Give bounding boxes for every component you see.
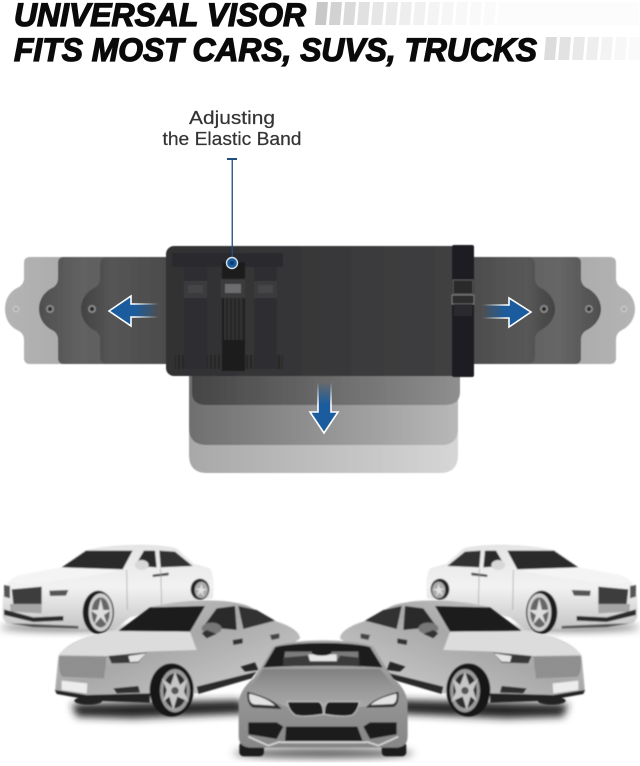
car: silver crossover, mid left <box>55 600 300 718</box>
arrow: slide down <box>310 382 338 433</box>
main visor body <box>166 245 474 377</box>
title stripe decoration, line one <box>315 2 639 25</box>
title: FITS MOST CARS, SUVS, TRUCKS <box>14 32 538 68</box>
velcro strap set <box>172 253 283 371</box>
title stripe decoration, line two <box>544 37 640 60</box>
left sliding extension panels <box>5 257 180 364</box>
title <box>14 0 538 68</box>
car: white sedan, back right <box>426 545 640 634</box>
callout leader line and dot <box>226 158 238 268</box>
car: grey coupe, front centre <box>233 640 413 758</box>
callout label: adjusting the elastic band: the Elastic Band <box>162 128 302 149</box>
right side buckle strap <box>452 245 474 377</box>
car: white sedan, back left <box>0 545 214 634</box>
bottom sliding extension panels <box>189 370 460 473</box>
car: silver crossover, mid right <box>340 600 585 718</box>
arrow: slide left <box>109 296 159 326</box>
arrow: slide right <box>482 298 531 327</box>
right sliding extension panels <box>460 257 635 364</box>
callout label: adjusting the elastic band: Adjusting <box>189 107 275 128</box>
callout label: adjusting the elastic band <box>162 107 302 149</box>
